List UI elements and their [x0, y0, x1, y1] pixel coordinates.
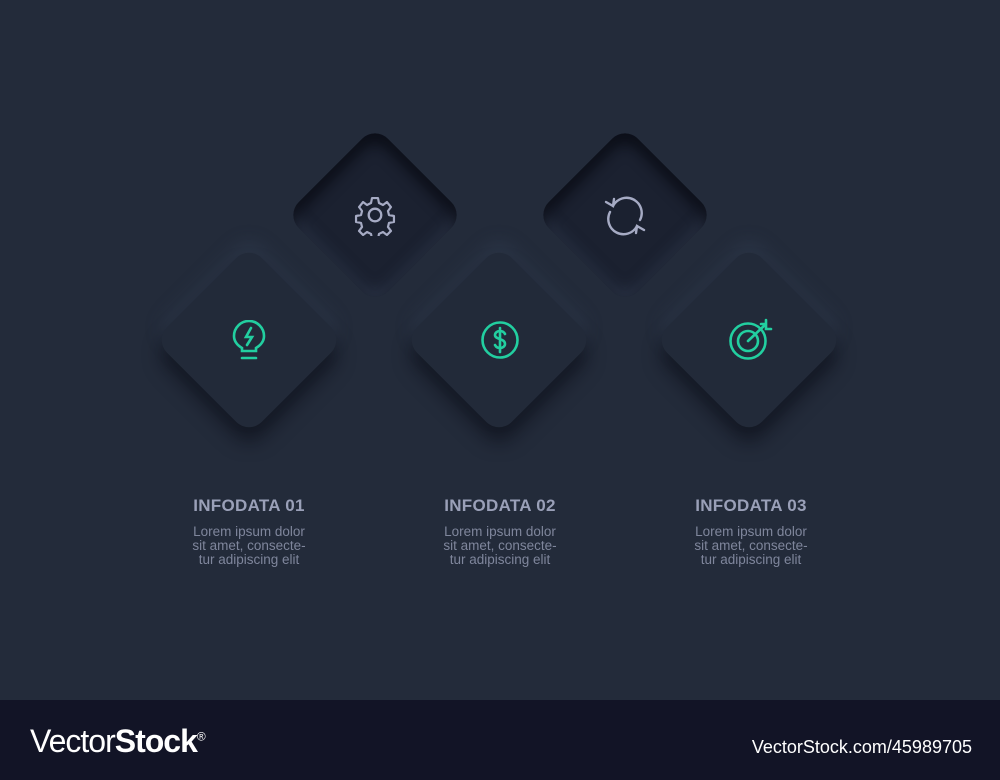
- text block 2: INFODATA 02: [444, 496, 556, 515]
- diamond recessed 1: [286, 126, 464, 304]
- text block 2: sit amet, consecte-: [443, 538, 557, 553]
- text block 3: tur adipiscing elit: [701, 552, 801, 567]
- icon: bulb: [232, 320, 266, 360]
- text block 3: sit amet, consecte-: [694, 538, 808, 553]
- diamond raised 2: [404, 245, 594, 435]
- footer: [0, 700, 1000, 780]
- text block 1: INFODATA 01: [193, 496, 305, 515]
- text block 3: Lorem ipsum dolor: [695, 524, 807, 539]
- logo: VectorStock®: [30, 723, 205, 759]
- url: VectorStock.com/45989705: [752, 737, 972, 757]
- diamond raised 3: [654, 245, 844, 435]
- diamond raised 1: [154, 245, 344, 435]
- icon: gear: [354, 197, 396, 236]
- text block 3: INFODATA 03: [695, 496, 807, 515]
- icon: dollar: [481, 321, 519, 359]
- text block 2: tur adipiscing elit: [450, 552, 550, 567]
- text block 2: Lorem ipsum dolor: [444, 524, 556, 539]
- text block 1: [192, 496, 306, 567]
- icon: refresh: [604, 196, 646, 236]
- icon: target: [729, 318, 772, 360]
- text block 1: sit amet, consecte-: [192, 538, 306, 553]
- text block 1: tur adipiscing elit: [199, 552, 299, 567]
- text block 1: Lorem ipsum dolor: [193, 524, 305, 539]
- text block 2: [443, 496, 557, 567]
- diamond recessed 2: [536, 126, 714, 304]
- text block 3: [694, 496, 808, 567]
